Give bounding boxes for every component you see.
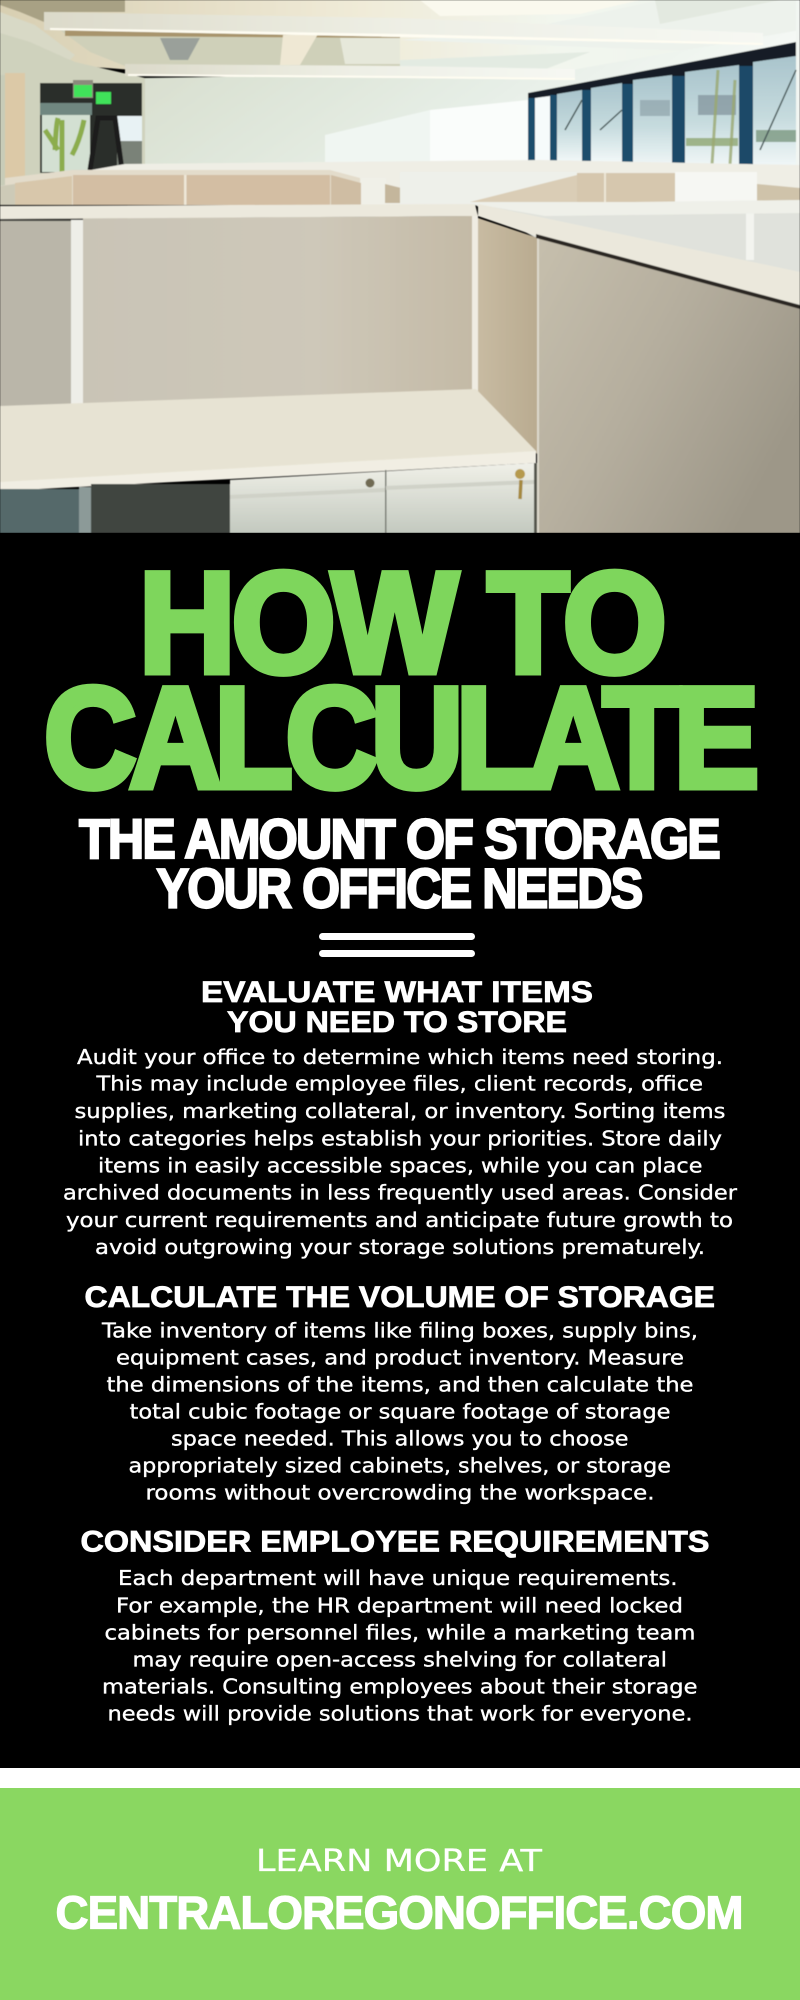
subtitle: YOUR OFFICE NEEDS (156, 856, 642, 920)
section 1 body: This may include employee files, client records, office (95, 1072, 703, 1096)
cactus (45, 118, 84, 172)
section 2 body (101, 1318, 698, 1505)
section 3: employee requirements (80, 1525, 710, 1726)
second row of cubicles (0, 160, 800, 205)
section 1 body: your current requirements and anticipate future growth to (66, 1208, 733, 1232)
section 1 body: avoid outgrowing your storage solutions prematurely. (95, 1235, 705, 1259)
desktop (0, 389, 536, 491)
light fixture 1 (44, 12, 763, 45)
section 2 body: equipment cases, and product inventory. Measure (116, 1346, 684, 1370)
section 1 body: archived documents in less frequently used areas. Consider (63, 1181, 738, 1205)
back-right panel (475, 200, 800, 290)
section 1 heading: EVALUATE WHAT ITEMS (201, 976, 593, 1009)
section 1 body: items in easily accessible spaces, while you can place (98, 1154, 702, 1178)
section 1 body: into categories helps establish your priorities. Store daily (78, 1126, 722, 1150)
left wall (0, 28, 145, 205)
title: how to calculate (44, 544, 754, 818)
ceiling (0, 0, 800, 110)
section 1 heading: YOU NEED TO STORE (227, 1006, 567, 1039)
ladder (90, 118, 122, 170)
under-desk opening (0, 484, 231, 533)
ceiling beams right (400, 0, 800, 55)
divider: double rule (319, 933, 475, 957)
subtitle (79, 807, 720, 920)
section 3 body (102, 1566, 698, 1726)
section 2 body: total cubic footage or square footage of storage (130, 1400, 670, 1424)
door opening (40, 83, 142, 173)
section 3 body: cabinets for personnel files, while a marketing team (104, 1621, 696, 1645)
ceiling left shadow (0, 0, 125, 22)
section 3 body: materials. Consulting employees about their storage (102, 1675, 698, 1699)
exit signs (73, 80, 111, 104)
black content panel (0, 533, 800, 1768)
windows (528, 0, 800, 180)
section 1 heading (201, 976, 593, 1039)
cabinet (230, 463, 537, 533)
section 1 body: supplies, marketing collateral, or inventory. Sorting items (74, 1099, 726, 1123)
section 3 body: needs will provide solutions that work for everyone. (108, 1702, 692, 1726)
section 2 body: Take inventory of items like filing boxes, supply bins, (101, 1318, 698, 1342)
section 3 body: may require open-access shelving for collateral (132, 1648, 667, 1672)
footer panel (0, 1788, 800, 2000)
footer: learn more at: LEARN MORE AT (256, 1844, 543, 1879)
building seen through windows (640, 100, 670, 116)
subtitle: THE AMOUNT OF STORAGE (79, 807, 720, 870)
section 2 body: the dimensions of the items, and then calculate the (106, 1373, 694, 1397)
section 1: evaluate items (63, 976, 738, 1259)
photo: office cubicles (0, 0, 800, 533)
back wall (142, 30, 800, 170)
section 3 heading: CONSIDER EMPLOYEE REQUIREMENTS (80, 1525, 710, 1558)
section 2 body: space needed. This allows you to choose (171, 1427, 628, 1451)
white separator band (0, 1768, 800, 1788)
section 3 body: Each department will have unique requirements. (118, 1566, 678, 1590)
section 3 body: For example, the HR department will need locked (116, 1593, 683, 1617)
section 2 body: appropriately sized cabinets, shelves, or storage (128, 1454, 671, 1478)
section 1 body: Audit your office to determine which items need storing. (77, 1045, 723, 1069)
footer: website url: CENTRALOREGONOFFICE.COM (56, 1886, 742, 1938)
near cubicle panels (0, 216, 800, 533)
light fixture 2 (125, 64, 575, 80)
section 2 heading: CALCULATE THE VOLUME OF STORAGE (84, 1281, 715, 1314)
section 2 body: rooms without overcrowding the workspace. (146, 1481, 654, 1505)
section 2: calculate volume (84, 1281, 715, 1505)
ceiling duct (160, 38, 200, 60)
cap rail (0, 200, 800, 309)
title: how to calculate: HOW TO (139, 544, 663, 703)
section 1 body (63, 1045, 738, 1259)
